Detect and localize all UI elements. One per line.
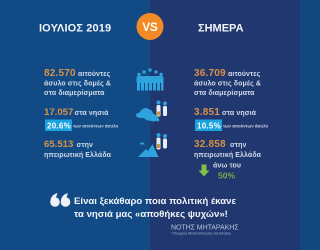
icon: refugees on mainland xyxy=(156,133,167,150)
badge: VS: VS xyxy=(142,22,158,34)
text block: right asylum seekers total: 36.709 xyxy=(194,68,226,79)
panel: right background xyxy=(150,0,300,250)
text block: left islands xyxy=(44,107,109,118)
arrow: decrease xyxy=(198,164,210,176)
text block: right mainland: άνω του xyxy=(213,162,241,170)
text block: left islands: στα νησιά xyxy=(74,110,109,117)
text block: right islands: 3.851 xyxy=(194,107,220,118)
text block: left mainland: ηπειρωτική Ελλάδα xyxy=(44,151,112,159)
quote: Είναι ξεκάθαρο ποια πολιτική έκανε xyxy=(74,196,236,207)
text block: left asylum seekers total: αιτούντες xyxy=(78,71,111,78)
attribution: Υπουργός Μετανάστευσης και Ασύλου xyxy=(172,232,231,236)
text block: right asylum seekers total: άσυλο στις δομές & xyxy=(194,80,261,88)
text block: left mainland xyxy=(44,139,112,159)
icon: quotation marks xyxy=(50,193,70,207)
icon: island xyxy=(136,108,159,121)
heading: today: ΣΗΜΕΡΑ xyxy=(198,22,244,34)
text block: right islands: στα νησιά xyxy=(222,110,257,117)
quote xyxy=(74,196,236,220)
text block: left mainland: 65.513 xyxy=(44,139,73,150)
text block: left asylum seekers total: στα διαμερίσματα xyxy=(44,90,105,97)
icon: refugees on island xyxy=(156,100,167,116)
text block: left asylum seekers total: 82.570 xyxy=(44,68,76,79)
text block: right mainland: 32.858 xyxy=(194,139,226,150)
icon: mountains xyxy=(138,142,158,157)
quote: τα νησιά μας «αποθήκες ψυχών»! xyxy=(74,209,228,220)
badge: VS xyxy=(136,13,164,40)
text block: right asylum seekers total: αιτούντες xyxy=(228,71,261,78)
attribution: ΝΟΤΗΣ ΜΗΤΑΡΑΚΗΣ xyxy=(171,224,239,232)
text block: right mainland: στην xyxy=(230,142,246,149)
text block: right asylum seekers total: στα διαμερίσματα xyxy=(194,90,255,97)
heading: July 2019: ΙΟΥΛΙΟΣ 2019 xyxy=(39,22,111,34)
callout: left islands share: 20.6% xyxy=(47,122,71,130)
callout: right islands share: 10.5% xyxy=(197,122,221,130)
panel: left background xyxy=(0,0,150,250)
icon: crowd of people xyxy=(136,68,164,90)
callout: right islands share: των αιτούντων άσυλο xyxy=(223,124,268,128)
text block: left asylum seekers total xyxy=(44,68,111,97)
attribution xyxy=(171,224,239,236)
callout: right islands share xyxy=(195,120,268,131)
callout: left islands share xyxy=(45,120,118,131)
text block: left mainland: στην xyxy=(76,142,93,149)
text block: right mainland xyxy=(194,139,262,170)
figure: decrease percentage: 50% xyxy=(218,170,235,180)
text block: right mainland: ηπειρωτική Ελλάδα xyxy=(194,151,262,159)
text block: left asylum seekers total: άσυλο στις δομές & xyxy=(44,80,111,88)
text block: right islands xyxy=(194,107,257,118)
text block: right asylum seekers total xyxy=(194,68,261,97)
text block: left islands: 17.057 xyxy=(44,107,73,118)
callout: left islands share: των αιτούντων άσυλο xyxy=(73,124,118,128)
